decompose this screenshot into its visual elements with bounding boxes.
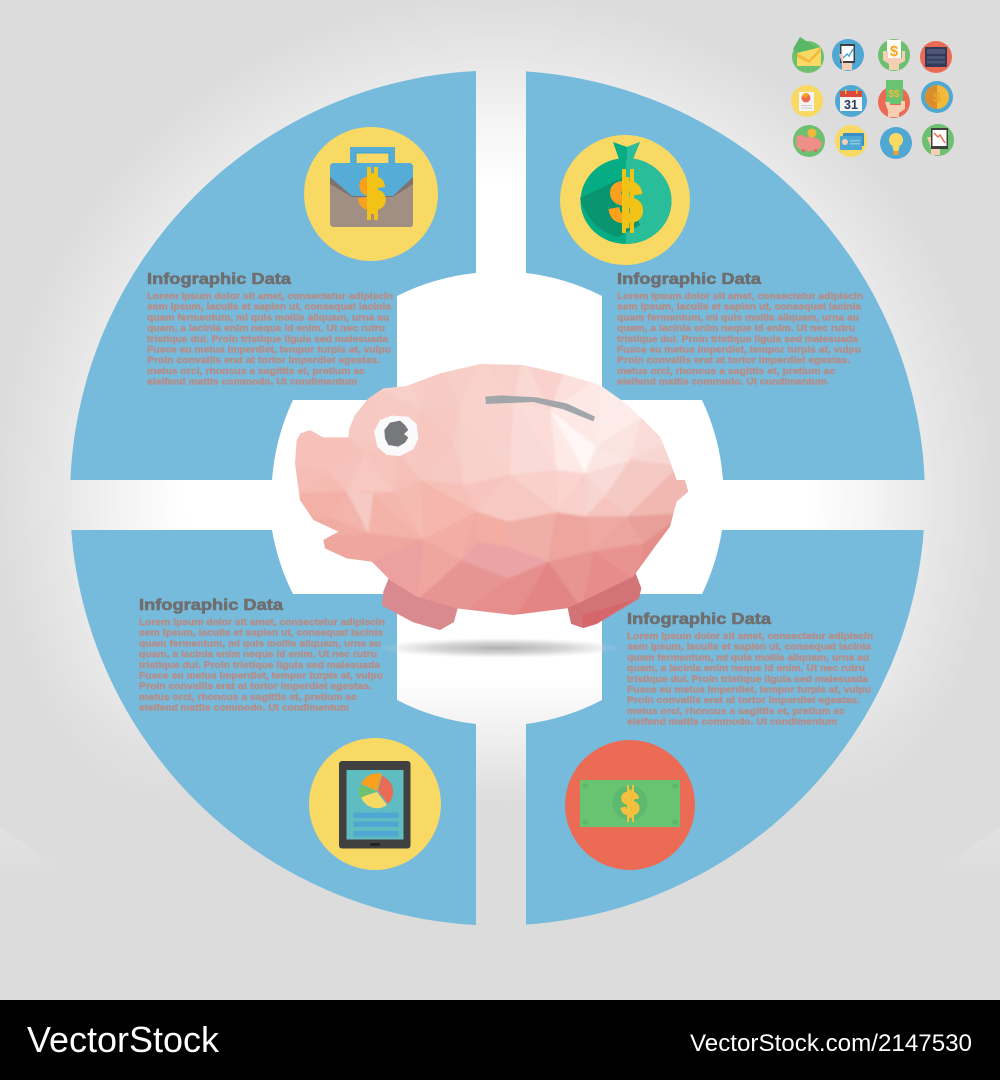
small icon: calendar: 31 xyxy=(844,98,858,112)
text block: top left: Proin convallis erat at tortor imperdiet egestas. xyxy=(147,354,380,365)
text block: top left: sem ipsum, iaculis et sapien ut, consequat lacinia xyxy=(147,301,392,312)
pig foot: left xyxy=(383,577,458,629)
text block: bottom left: sem ipsum, iaculis et sapien ut, consequat lacinia xyxy=(139,627,384,638)
small icon: hand with falling chart tablet xyxy=(922,124,954,156)
text block: top right: Fusce eu metus imperdiet, tempor turpis at, vulpu xyxy=(617,344,861,354)
pig foot: right xyxy=(567,573,641,627)
small icon: hand holding dollar paper xyxy=(878,39,910,71)
piggy shadow xyxy=(378,638,622,658)
icon: dollar bill: $ xyxy=(621,785,639,822)
text block: bottom right: Infographic Data xyxy=(627,611,771,628)
small icon: envelope xyxy=(792,37,824,73)
footer bar xyxy=(0,1000,1000,1080)
text block: bottom right: quam fermentum, mi quis mollis aliquam, urna au xyxy=(627,651,869,662)
text block: top left: quam fermentum, mi quis mollis aliquam, urna au xyxy=(147,311,389,322)
watermark: VectorStock logo: VectorStock xyxy=(27,1019,220,1060)
text block: bottom left: Infographic Data xyxy=(139,597,283,614)
small icon: hand holding dollar paper: $ xyxy=(890,43,899,60)
icon: money bag: $ xyxy=(610,170,642,235)
text block: bottom left: quam fermentum, mi quis mollis aliquam, urna au xyxy=(139,637,381,648)
icon: briefcase xyxy=(304,127,438,261)
icon: briefcase: $ xyxy=(359,167,385,219)
text block: top right: Lorem ipsum dolor sit amet, consectetur adipiscin xyxy=(617,290,863,301)
small icon: piggy bank xyxy=(793,125,825,157)
pig eye xyxy=(374,416,418,456)
piggy bank illustration xyxy=(287,357,697,629)
small icon: hand holding banknote: $$ xyxy=(888,89,900,100)
text block: top right: sem ipsum, iaculis et sapien ut, consequat lacinia xyxy=(617,301,862,312)
text block: bottom right: Fusce eu metus imperdiet, tempor turpis at, vulpu xyxy=(627,684,871,694)
text block: top right: Proin convallis erat at tortor imperdiet egestas. xyxy=(617,354,850,365)
small icon: gold coin: $ xyxy=(933,89,941,105)
text block: bottom right: Lorem ipsum dolor sit amet, consectetur adipiscin xyxy=(627,630,873,641)
small icon: light bulb xyxy=(880,127,912,159)
text block: bottom right: tristique dui. Proin tristique ligula sed malesuada xyxy=(627,673,869,684)
text block: bottom left: Fusce eu metus imperdiet, tempor turpis at, vulpu xyxy=(139,670,383,680)
text block: bottom left: quam, a lacinia enim neque id enim. Ut nec rutru xyxy=(139,648,377,659)
small icon: hand holding banknote xyxy=(878,80,910,118)
text block: top left: Lorem ipsum dolor sit amet, consectetur adipiscin xyxy=(147,290,393,301)
icon: tablet report xyxy=(309,738,441,870)
text block: top left: tristique dui. Proin tristique ligula sed malesuada xyxy=(147,333,389,344)
pig body mesh xyxy=(287,357,697,623)
text block: top right xyxy=(617,271,863,387)
icon: dollar bill xyxy=(565,740,695,870)
small icon: calculator xyxy=(920,41,952,73)
text block: bottom right: quam, a lacinia enim neque id enim. Ut nec rutru xyxy=(627,662,865,673)
text block: top left: Fusce eu metus imperdiet, tempor turpis at, vulpu xyxy=(147,344,391,354)
text block: top right: eleifend mattis commodo. Ut condimentum xyxy=(617,376,827,387)
text block: bottom left: eleifend mattis commodo. Ut condimentum xyxy=(139,702,349,713)
panel: blue quadrant ring xyxy=(70,70,925,926)
text block: top left: metus orci, rhoncus a sagittis et, pretium ac xyxy=(147,365,365,376)
text block: top left: Infographic Data xyxy=(147,271,291,288)
icon: money bag xyxy=(560,135,690,265)
icon: briefcase: $ xyxy=(359,167,385,219)
watermark: image url: VectorStock.com/2147530 xyxy=(690,1030,972,1057)
text block: top left: eleifend mattis commodo. Ut condimentum xyxy=(147,376,357,387)
text block: top right: Infographic Data xyxy=(617,271,761,288)
text block: bottom left: Lorem ipsum dolor sit amet, consectetur adipiscin xyxy=(139,616,385,627)
text block: top right: quam fermentum, mi quis mollis aliquam, urna au xyxy=(617,311,859,322)
text block: top right: metus orci, rhoncus a sagittis et, pretium ac xyxy=(617,365,835,376)
text block: top right: quam, a lacinia enim neque id enim. Ut nec rutru xyxy=(617,322,855,333)
small icon: credit card xyxy=(835,125,867,157)
text block: top left: quam, a lacinia enim neque id enim. Ut nec rutru xyxy=(147,322,385,333)
text block: bottom right: sem ipsum, iaculis et sapien ut, consequat lacinia xyxy=(627,641,872,652)
small icon: hand with chart tablet xyxy=(832,39,864,71)
text block: bottom right: eleifend mattis commodo. Ut condimentum xyxy=(627,716,837,727)
text block: bottom left: metus orci, rhoncus a sagittis et, pretium ac xyxy=(139,691,357,702)
text block: bottom right: metus orci, rhoncus a sagittis et, pretium ac xyxy=(627,705,845,716)
pig coin slot xyxy=(485,395,595,421)
text block: top left xyxy=(147,271,393,387)
icon: money bag: $ xyxy=(610,170,642,235)
text block: bottom right xyxy=(627,611,873,727)
text block: bottom left: tristique dui. Proin tristique ligula sed malesuada xyxy=(139,659,381,670)
small icon: report document xyxy=(791,85,823,117)
small icon: gold coin xyxy=(921,81,953,113)
small icon: calendar xyxy=(835,85,867,117)
text block: bottom left: Proin convallis erat at tortor imperdiet egestas. xyxy=(139,680,372,691)
text block: top right: tristique dui. Proin tristique ligula sed malesuada xyxy=(617,333,859,344)
text block: bottom left xyxy=(139,597,385,713)
text block: bottom right: Proin convallis erat at tortor imperdiet egestas. xyxy=(627,694,860,705)
